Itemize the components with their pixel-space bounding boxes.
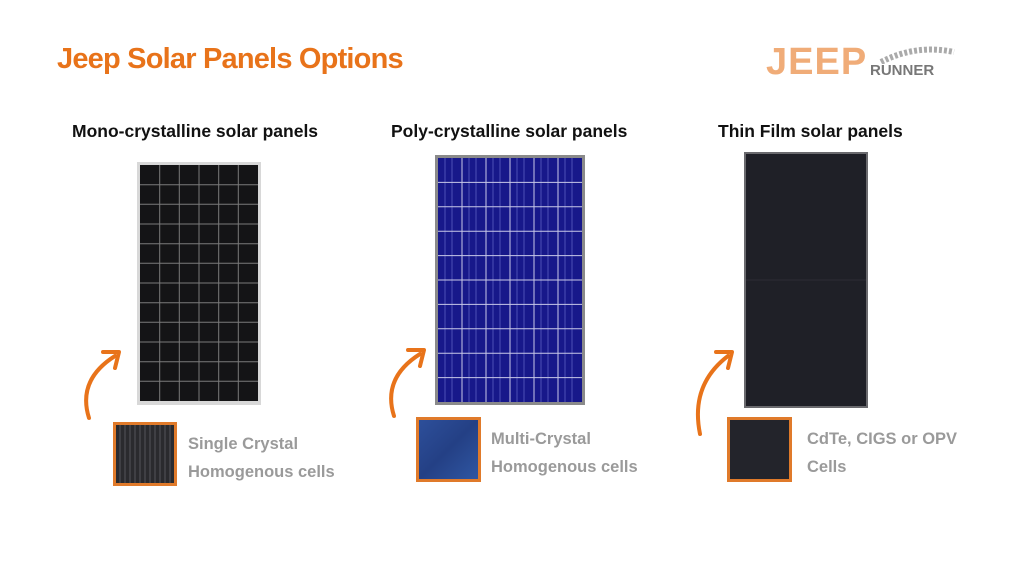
- heading mono: Mono-crystalline solar panels: [72, 121, 318, 141]
- logo tread icon: [880, 46, 955, 64]
- swatch: thin: [727, 417, 792, 482]
- logo: [766, 41, 955, 83]
- caption: poly: [491, 430, 638, 476]
- logo text JEEP: JEEP: [766, 41, 867, 83]
- title: Jeep Solar Panels Options: [57, 43, 403, 75]
- caption: thin: Cells: [807, 458, 846, 476]
- caption: poly: Homogenous cells: [491, 458, 638, 476]
- arrow: mono: [84, 350, 121, 420]
- caption: mono: Single Crystal: [188, 435, 298, 453]
- arrow: thin: [696, 350, 734, 436]
- swatch: mono: [113, 422, 177, 486]
- heading poly: Poly-crystalline solar panels: [391, 121, 627, 141]
- caption: poly: Multi-Crystal: [491, 430, 591, 448]
- caption: mono: [188, 435, 335, 481]
- arrow: poly: [389, 348, 426, 418]
- caption: thin: [807, 430, 957, 476]
- caption: mono: Homogenous cells: [188, 463, 335, 481]
- panel: mono: [137, 162, 261, 405]
- caption: thin: CdTe, CIGS or OPV: [807, 430, 957, 448]
- panel: thin film: [744, 152, 868, 408]
- swatch: poly: [416, 417, 481, 482]
- logo text RUNNER: RUNNER: [870, 62, 934, 79]
- panel: poly: [435, 155, 585, 405]
- heading thin: Thin Film solar panels: [718, 121, 903, 141]
